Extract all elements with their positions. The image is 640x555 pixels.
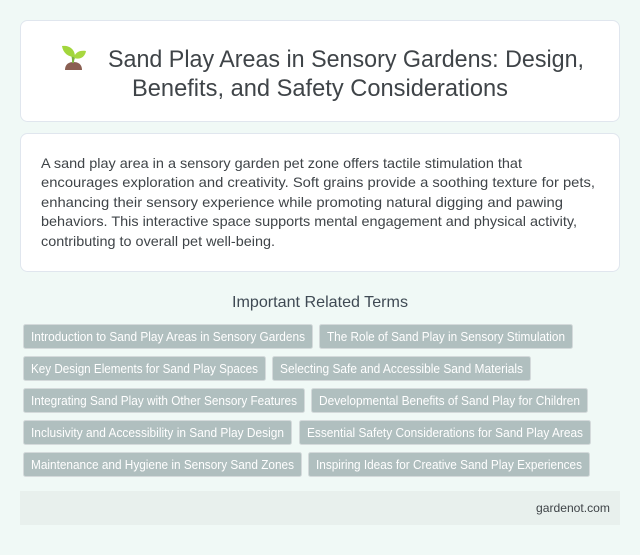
tag: [24, 324, 312, 348]
text block: description: A sand play area in a sensory garden pet zone offers tactile stimulation that: [41, 155, 522, 171]
tag: [24, 388, 304, 412]
title: Sand Play Areas in Sensory Gardens: Design,: [108, 46, 584, 73]
tag: [24, 452, 302, 476]
tag: [320, 324, 572, 348]
tag: Maintenance and Hygiene in Sensory Sand Zones: [31, 458, 294, 472]
text block: description: behaviors. This interactive space supports mental engagement and physical activity,: [41, 213, 577, 229]
tag: Essential Safety Considerations for Sand Play Areas: [307, 426, 583, 440]
panel: title card: [20, 20, 620, 122]
tag: Selecting Safe and Accessible Sand Materials: [280, 362, 523, 376]
tag: Integrating Sand Play with Other Sensory Features: [31, 394, 297, 408]
tag: [308, 452, 590, 476]
footer: [20, 491, 620, 525]
tag: Inclusivity and Accessibility in Sand Play Design: [31, 426, 284, 440]
title: [108, 46, 584, 102]
tag: [24, 420, 292, 444]
footer: gardenot.com: [536, 501, 610, 515]
tag: Developmental Benefits of Sand Play for Children: [319, 394, 580, 408]
tag: Key Design Elements for Sand Play Spaces: [31, 362, 258, 376]
panel: description: [20, 134, 620, 272]
text block: description: contributing to overall pet well-being.: [41, 233, 275, 249]
tag: Inspiring Ideas for Creative Sand Play Experiences: [316, 458, 582, 472]
text block: description: enhancing their sensory experience while promoting natural digging and pawing: [41, 194, 563, 210]
tag: The Role of Sand Play in Sensory Stimulation: [327, 330, 565, 344]
text block: description: [41, 155, 595, 249]
title: Benefits, and Safety Considerations: [132, 75, 508, 102]
text block: description: encourages exploration and creativity. Soft grains provide a soothing texture for pets,: [41, 174, 595, 190]
icon: seedling: [62, 46, 86, 70]
tag: [300, 420, 590, 444]
heading: related terms: Important Related Terms: [232, 294, 408, 311]
tag: Introduction to Sand Play Areas in Sensory Gardens: [31, 330, 305, 344]
tag: [272, 356, 530, 380]
tag: [312, 388, 588, 412]
tag: [24, 356, 266, 380]
tags: related terms: [24, 324, 590, 476]
